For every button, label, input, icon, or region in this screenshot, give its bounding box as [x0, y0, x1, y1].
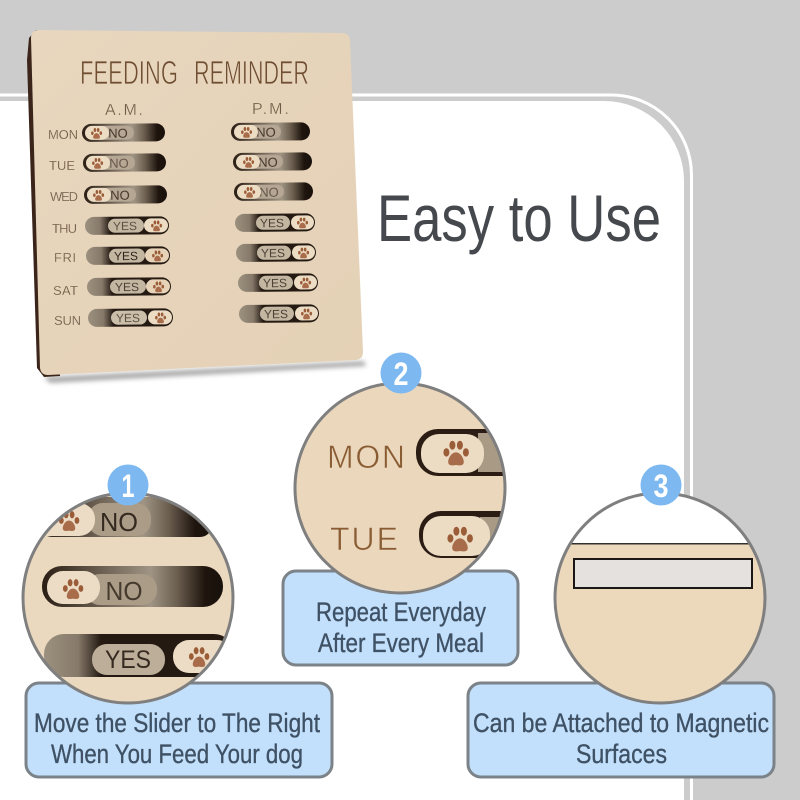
step 2 caption text: Repeat Everyday: [316, 597, 486, 627]
day labels: THU: [52, 221, 77, 236]
day labels: SUN: [54, 313, 81, 328]
step 2 caption text: After Every Meal: [318, 628, 484, 658]
board title: REMINDER: [194, 54, 309, 91]
P.M. sliders: YES: [260, 216, 284, 230]
step 1 caption text: Move the Slider to The Right: [34, 708, 320, 738]
board title: [80, 54, 309, 91]
step 3 caption box: [468, 683, 774, 777]
A.M. sliders: YES: [115, 280, 139, 294]
step 2 detail circle: day labels close-up: TUE: [330, 521, 398, 557]
P.M. sliders: [231, 122, 319, 323]
step 1 caption box: [26, 683, 332, 777]
board title: FEEDING: [80, 54, 178, 91]
step 1 detail circle: slider close-up: YES: [105, 646, 151, 674]
step 1 detail circle: slider close-up: [23, 493, 234, 703]
step 1 caption text: [34, 708, 320, 769]
step 3 number badge: 3: [654, 468, 668, 504]
day labels: SAT: [53, 283, 78, 298]
step 1 number badge: 1: [122, 468, 134, 504]
step 1 detail circle: slider close-up: NO: [106, 576, 142, 606]
A.M. sliders: NO: [110, 188, 130, 203]
product photo: wooden feeding reminder board: [27, 30, 366, 383]
step 3 number badge: [640, 464, 682, 506]
day labels: [48, 127, 81, 328]
A.M. column label: A.M.: [105, 102, 143, 119]
step 3 caption text: Surfaces: [576, 739, 667, 769]
step 2 caption box: [283, 571, 518, 665]
step 1 number badge: [108, 464, 148, 506]
P.M. sliders: YES: [264, 307, 288, 321]
step 2 number badge: 2: [394, 356, 408, 392]
P.M. sliders: YES: [263, 276, 287, 290]
A.M. sliders: YES: [114, 249, 138, 263]
heading: Easy to Use: Easy to Use: [377, 181, 661, 255]
P.M. sliders: NO: [258, 155, 278, 170]
P.M. sliders: NO: [259, 185, 279, 200]
day labels: FRI: [54, 250, 76, 265]
day labels: TUE: [49, 158, 75, 173]
step 2 number badge: [380, 352, 422, 394]
step 2 detail circle: day labels close-up: [295, 383, 529, 593]
step 3 detail circle: magnet on board back: [550, 490, 770, 703]
A.M. sliders: [82, 123, 173, 327]
P.M. sliders: YES: [261, 246, 285, 260]
step 2 detail circle: day labels close-up: MON: [327, 439, 405, 475]
day labels: WED: [50, 189, 78, 204]
A.M. sliders: YES: [116, 311, 140, 325]
step 1 caption text: When You Feed Your dog: [51, 739, 303, 769]
P.M. sliders: NO: [256, 125, 276, 140]
step 1 detail circle: slider close-up: NO: [100, 507, 138, 537]
A.M. sliders: NO: [109, 156, 129, 171]
day labels: MON: [48, 127, 78, 142]
P.M. column label: P.M.: [252, 101, 289, 118]
A.M. sliders: YES: [113, 219, 137, 233]
step 2 caption text: [316, 597, 486, 658]
step 3 caption text: [473, 708, 769, 769]
A.M. sliders: NO: [108, 126, 128, 141]
